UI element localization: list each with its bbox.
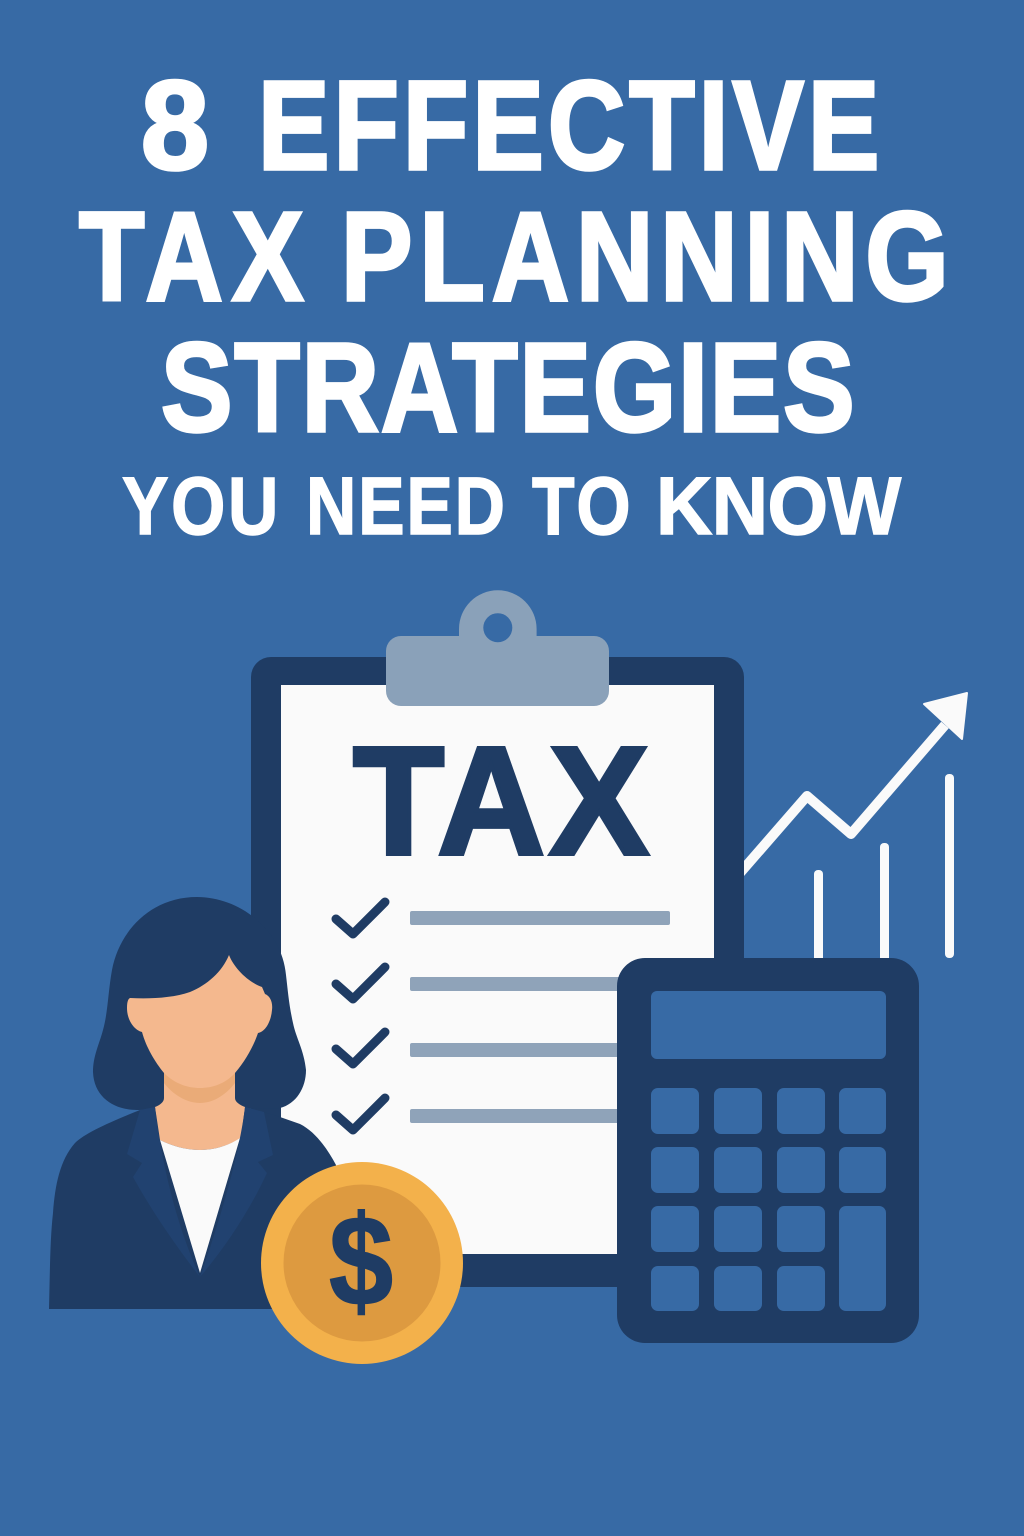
title: 8	[141, 56, 209, 196]
person	[49, 897, 345, 1309]
subtitle: TO	[532, 461, 631, 552]
lapels	[127, 1107, 200, 1277]
subtitle: NEED	[306, 461, 505, 552]
blouse	[160, 1138, 240, 1273]
title: PLANNING	[341, 186, 949, 327]
title	[79, 55, 949, 458]
neck shadow	[164, 1072, 235, 1103]
calculator	[617, 958, 919, 1343]
growth chart arrow	[740, 693, 967, 962]
title: EFFECTIVE	[258, 55, 879, 196]
suit	[49, 1110, 345, 1309]
title: TAX	[79, 186, 303, 327]
title: STRATEGIES	[161, 317, 855, 458]
clipboard heading TAX: TAX	[353, 716, 649, 887]
clipboard clip	[386, 590, 609, 706]
clipboard	[251, 590, 744, 1287]
face	[127, 955, 272, 1088]
subtitle	[122, 460, 902, 552]
hair	[93, 897, 306, 1110]
checklist	[336, 902, 670, 1130]
calculator keys	[651, 1088, 886, 1311]
calculator screen	[651, 991, 886, 1059]
subtitle: KNOW	[656, 460, 902, 551]
coin: $	[329, 1189, 393, 1332]
coin	[261, 1162, 463, 1364]
neck	[155, 1060, 245, 1150]
subtitle: YOU	[122, 461, 278, 552]
